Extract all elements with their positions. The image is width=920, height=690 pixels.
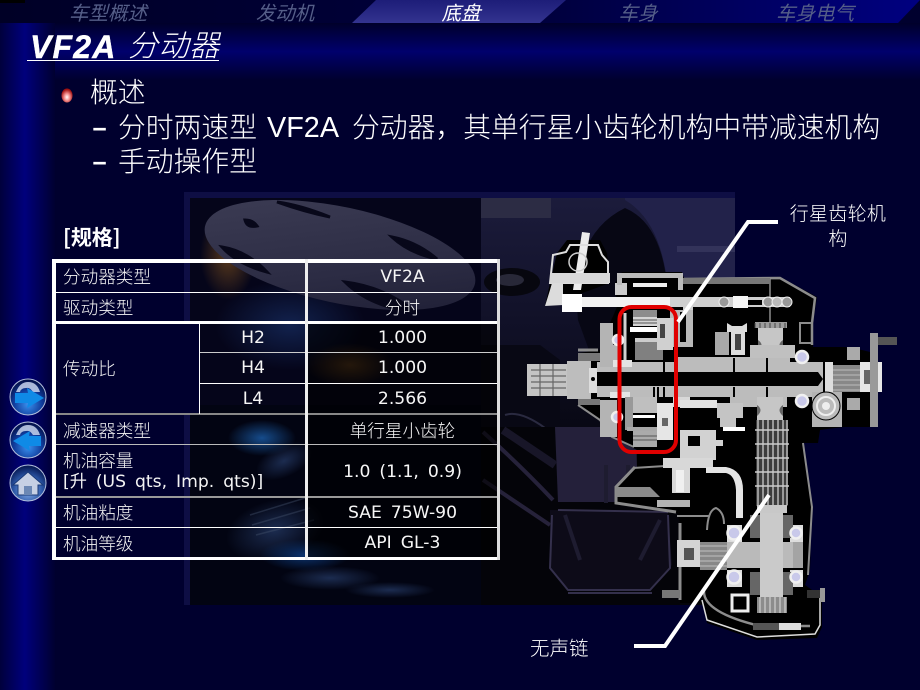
bullet line 1: – <box>92 106 107 146</box>
nav item active: 底盘 <box>441 3 480 25</box>
ratio label: H4 <box>241 358 265 378</box>
ratio label: H2 <box>241 328 265 348</box>
active tab <box>352 0 566 23</box>
output shaft <box>812 333 897 427</box>
value: 单行星小齿轮 <box>350 418 455 443</box>
background photo collage <box>184 192 735 605</box>
spec table <box>52 259 500 560</box>
transfer case cutaway diagram <box>527 220 897 648</box>
value: 1.000 <box>378 328 427 348</box>
circuit board <box>190 405 481 605</box>
bullet line 2: 手动操作型 <box>118 140 257 180</box>
planetary gear set <box>600 310 717 447</box>
label: planetary gear: 构 <box>828 224 848 251</box>
label: silent chain: 无声链 <box>530 632 589 661</box>
value: 2.566 <box>378 389 427 409</box>
red highlight: planetary gear set <box>620 307 676 452</box>
row label: 分动器类型 <box>63 264 151 289</box>
title: VF2A <box>30 29 117 65</box>
bullet icon <box>62 88 72 102</box>
title: 分动器 <box>128 30 220 63</box>
nav item: 车型概述 <box>69 3 147 25</box>
spec heading: [规格] <box>63 222 120 252</box>
input shaft <box>527 353 600 405</box>
value: SAE 75W-90 <box>348 503 457 523</box>
leader line: planetary gear <box>678 222 778 322</box>
icon: home <box>10 465 46 501</box>
rail balls <box>670 296 792 308</box>
main shaft <box>597 357 823 407</box>
nav item: 发动机 <box>256 3 314 25</box>
heading: overview: 概述 <box>90 71 146 111</box>
icon: back arrow <box>10 422 46 458</box>
overview text <box>90 71 880 180</box>
shift fork mechanism <box>545 232 792 347</box>
icon: next arrow <box>10 379 46 415</box>
label: planetary gear <box>790 199 886 251</box>
nav item: 车身电气 <box>776 3 854 25</box>
navigation bar <box>69 0 856 25</box>
row label: 驱动类型 <box>63 295 133 320</box>
housing silhouette <box>578 272 878 640</box>
bearings <box>612 335 808 584</box>
row label: 机油粘度 <box>63 500 133 525</box>
car photo <box>481 192 735 428</box>
value: VF2A <box>380 267 425 287</box>
ratio label: L4 <box>243 389 263 409</box>
bullet line 1: 分动器，其单行星小齿轮机构中带减速机构 <box>352 106 880 146</box>
bullet line 2: – <box>92 140 107 180</box>
value: 分时 <box>385 295 420 320</box>
secondary gear cluster <box>616 323 747 518</box>
table labels <box>63 264 462 556</box>
bullet line 1: 分时两速型 <box>118 106 257 146</box>
value: 1.0 (1.1, 0.9) <box>343 462 462 482</box>
nav item: 车身 <box>618 3 658 25</box>
chain and upper sprocket <box>750 322 795 506</box>
bullet line 1: VF2A <box>267 112 339 144</box>
row label unit: [升 (US qts, Imp. qts)] <box>63 472 263 492</box>
value: API GL-3 <box>365 533 440 553</box>
value: 1.000 <box>378 358 427 378</box>
leader line: silent chain <box>634 495 769 646</box>
row label: 机油容量 <box>63 448 133 473</box>
car frame photo <box>481 427 735 605</box>
housing walls <box>578 278 820 637</box>
piston <box>190 179 485 405</box>
title <box>27 26 219 61</box>
output sprocket <box>662 505 825 630</box>
row label: 减速器类型 <box>63 418 151 443</box>
row label: 机油等级 <box>63 531 133 556</box>
row label: 传动比 <box>63 356 116 381</box>
label: planetary gear: 行星齿轮机 <box>790 199 886 226</box>
photo frame edge <box>184 192 735 605</box>
bullet line 1 <box>92 106 880 146</box>
side navigation buttons <box>10 378 46 502</box>
